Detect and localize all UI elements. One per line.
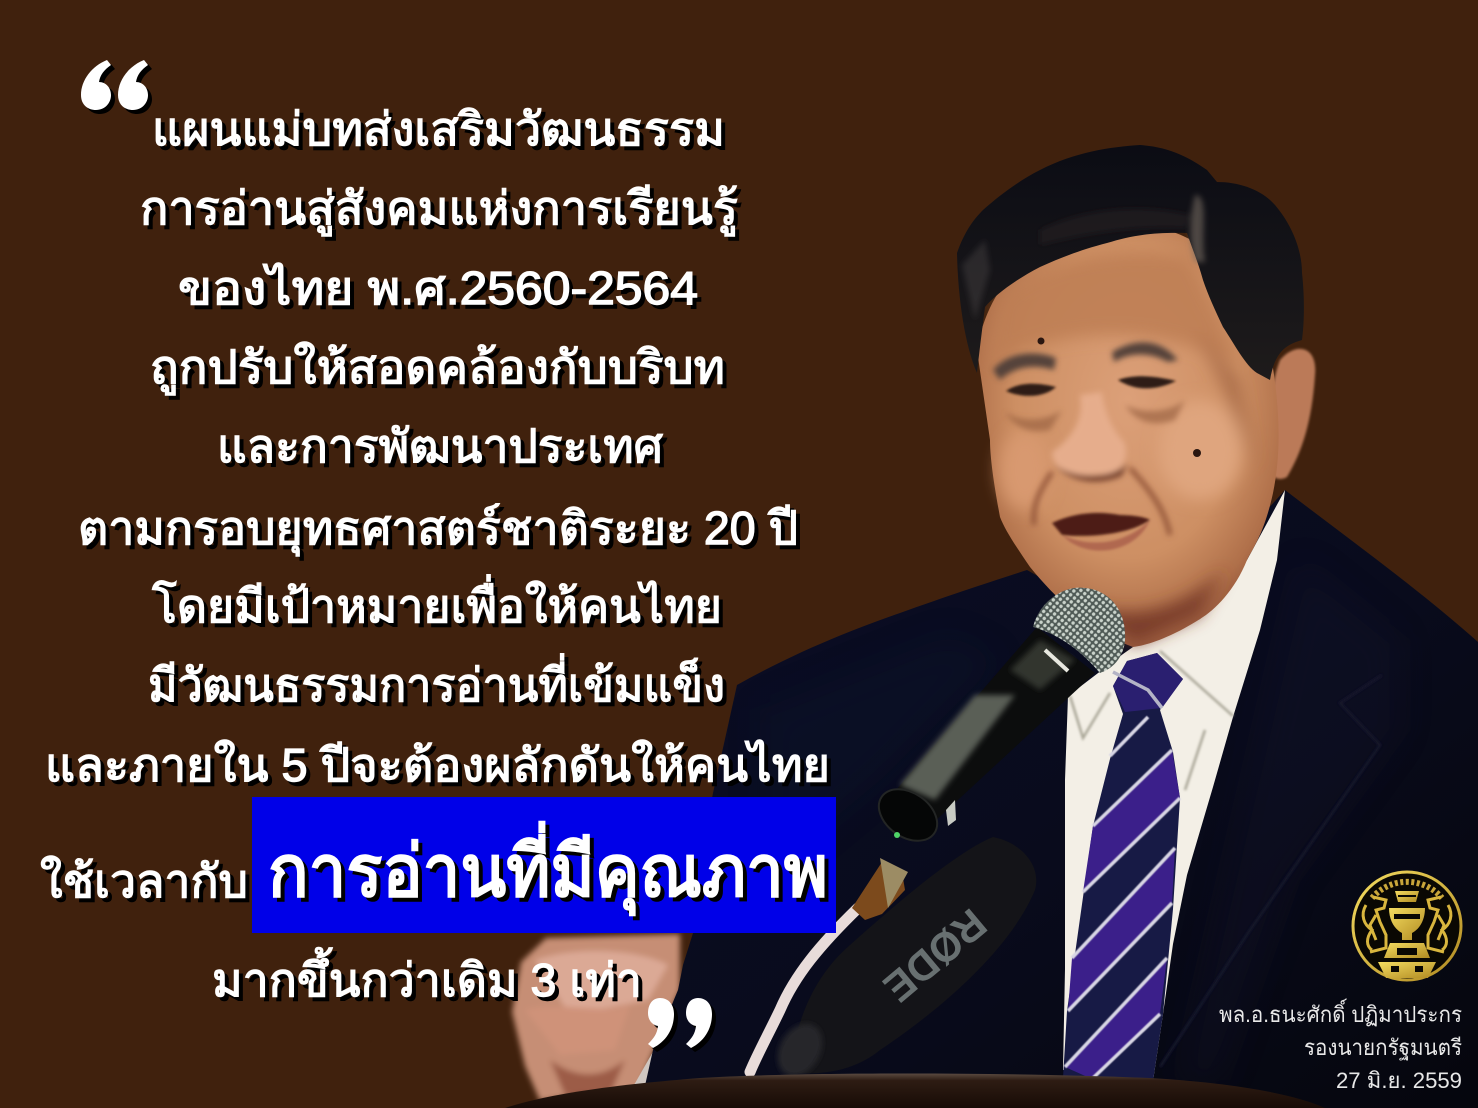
quote text: และการพัฒนาประเทศ	[217, 420, 663, 472]
quote text: มีวัฒนธรรมการอ่านที่เข้มแข็ง	[148, 653, 725, 711]
emblem: government seal	[1353, 872, 1461, 980]
closing quotation mark	[648, 998, 712, 1048]
suit	[640, 490, 1478, 1108]
caption: name, title, date	[1219, 999, 1462, 1093]
microphone collar	[869, 779, 947, 851]
quote text: มากขึ้นกว่าเดิม 3 เท่า	[212, 947, 642, 1006]
RODE label: RØDE	[875, 900, 995, 1012]
quote text: ถูกปรับให้สอดคล้องกับบริบท	[150, 341, 725, 395]
quote text: และภายใน 5 ปีจะต้องผลักดันให้คนไทย	[45, 739, 830, 791]
suit shading	[760, 560, 1400, 1080]
seal top ornament	[1372, 882, 1442, 898]
XLR connector	[852, 862, 905, 920]
highlighted phrase: การอ่านที่มีคุณภาพ	[268, 822, 828, 915]
collar fold shadow	[1070, 651, 1233, 790]
caption: name, title, date: 27 มิ.ย. 2559	[1336, 1068, 1462, 1093]
lectern	[505, 1074, 1325, 1108]
hair	[957, 145, 1304, 380]
quote text: ใช้เวลากับ	[40, 855, 248, 907]
shirt and collar	[1063, 490, 1285, 1081]
mouth	[1052, 513, 1150, 551]
shirt cuff	[634, 1050, 665, 1085]
quote text: การอ่านสู่สังคมแห่งการเรียนรู้	[140, 182, 738, 236]
hair sheen	[962, 195, 1205, 320]
quote text: แผนแม่บทส่งเสริมวัฒนธรรม	[152, 103, 725, 155]
microphone highlights	[900, 640, 1075, 800]
cable	[750, 908, 858, 1072]
tie	[1063, 653, 1183, 1081]
smile lines	[1034, 468, 1170, 535]
gray bulb	[769, 1016, 831, 1084]
eyebrows	[993, 342, 1178, 380]
caption: name, title, date: รองนายกรัฐมนตรี	[1304, 1035, 1462, 1061]
seal bowl	[1378, 891, 1436, 978]
status light	[894, 832, 900, 838]
ear	[1270, 349, 1315, 479]
quote text: ของไทย พ.ศ.2560-2564	[178, 262, 698, 314]
highlight box	[252, 797, 836, 933]
face	[977, 223, 1279, 647]
eye bags	[1005, 400, 1185, 431]
microphone clip	[1045, 650, 1068, 671]
nose	[1052, 392, 1128, 482]
quote text: โดยมีเป้าหมายเพื่อให้คนไทย	[152, 574, 722, 632]
eyes	[1006, 376, 1176, 396]
hand	[512, 934, 680, 1101]
mic tag	[946, 800, 956, 826]
seal right lion	[1428, 897, 1451, 952]
quote text: ตามกรอบยุทธศาสตร์ชาติระยะ 20 ปี	[78, 502, 798, 557]
seal bowl gaps	[1391, 895, 1423, 972]
seal left lion	[1363, 897, 1386, 952]
quote text	[40, 103, 830, 1006]
photo: speaker at microphone	[505, 145, 1478, 1108]
opening quotation mark	[81, 60, 148, 110]
microphone body	[890, 627, 1095, 823]
cheek and forehead tones	[990, 253, 1255, 645]
microphone head	[1033, 588, 1125, 673]
moles	[1038, 338, 1201, 457]
caption: name, title, date: พล.อ.ธนะศักดิ์ ปฏิมาประกร	[1219, 999, 1462, 1027]
windshield foam	[790, 837, 1036, 1073]
lapel lines	[1160, 675, 1382, 1067]
